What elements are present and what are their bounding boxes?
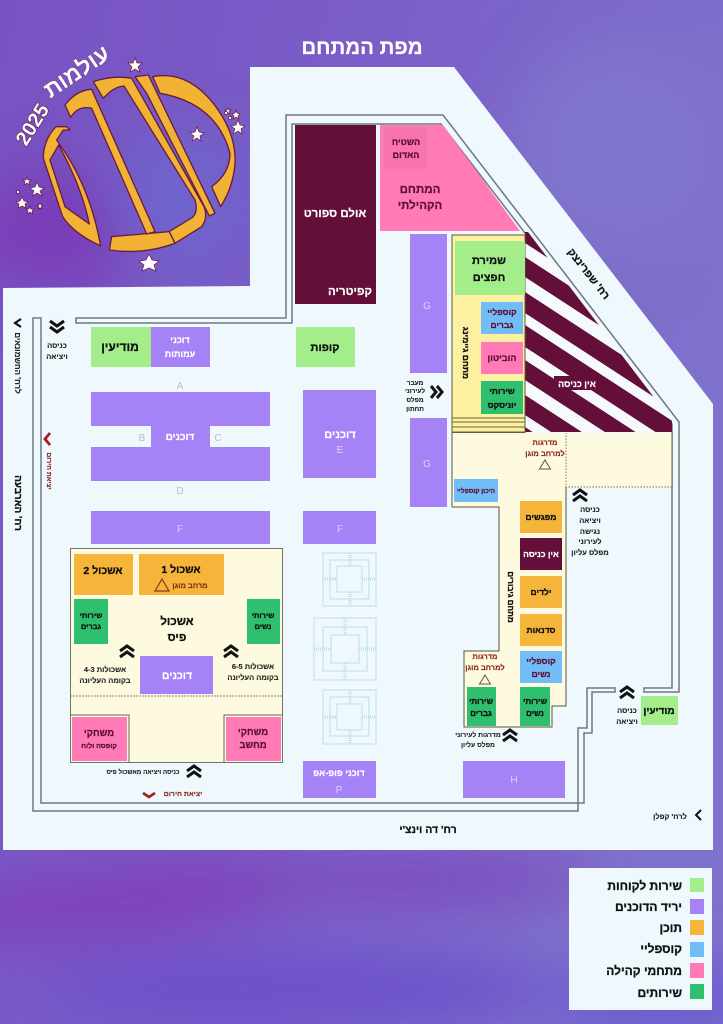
title: מפת המתחם	[301, 36, 423, 59]
legend: content	[660, 920, 704, 935]
vertical zone label: מתחם גיבורים	[506, 571, 515, 623]
pop-up booths: P	[336, 785, 343, 796]
accessible entrance note: ויציאה	[579, 516, 601, 525]
accessible entrance note: לעירוני	[578, 537, 602, 546]
booths G lower: G	[423, 459, 431, 470]
community area: המתחם	[400, 184, 440, 196]
decorative seating squares	[314, 553, 376, 744]
perimeter walls	[33, 115, 679, 811]
women's cosplay: נשים	[532, 669, 550, 679]
booths F right	[303, 511, 376, 544]
logo emblem	[43, 75, 235, 251]
computer games	[226, 717, 281, 761]
street label HaArbaa: רח' הארבעה	[12, 475, 23, 531]
booths F left: F	[177, 524, 183, 535]
women's toilets: שירותי	[252, 611, 274, 620]
kids	[520, 576, 562, 608]
men's toilets	[467, 687, 496, 726]
accessible entrance note	[571, 490, 609, 557]
community area: האדום	[393, 150, 419, 160]
storage room: שמירת	[472, 255, 506, 267]
men's toilets: שירותי	[469, 697, 494, 706]
street label Da Vinci: רח' דה וינצ'י	[399, 824, 457, 836]
accessible entrance note: מפלס עליון	[571, 548, 609, 557]
booths E	[303, 390, 376, 478]
computer games: משחקי	[238, 727, 268, 738]
east entrance note: כניסה	[617, 706, 637, 715]
sports hall: אולם ספורט	[304, 207, 366, 220]
cosplay prep	[454, 479, 498, 502]
community area	[380, 125, 520, 231]
meetups	[520, 501, 562, 533]
passage note: תחתון	[406, 406, 424, 413]
legend: cosplay: קוספליי	[640, 942, 682, 956]
booths G upper	[410, 234, 447, 373]
information desk east: מודיעין	[643, 706, 675, 717]
legend: toilets	[638, 984, 704, 1000]
legend: content: תוכן	[660, 921, 682, 935]
men's toilets: גברים	[81, 622, 102, 631]
women's toilets: נשים	[526, 709, 544, 718]
west entrance	[46, 321, 68, 361]
community area: הקהילתי	[398, 199, 442, 212]
booths H: H	[510, 775, 518, 786]
east entrance note: ויציאה	[616, 717, 638, 726]
hall 1: מרחב מוגן	[172, 581, 208, 590]
booths G upper: G	[423, 301, 431, 312]
pais hall entrance	[107, 766, 201, 777]
women's toilets	[247, 599, 280, 644]
stairs to halls 5-6	[224, 646, 279, 682]
booths F left	[91, 511, 270, 544]
street label Kaplan: לרח' קפלן	[653, 812, 687, 821]
information desk and NGO booths: מודיעין	[101, 340, 139, 354]
accessible entrance note: כניסה	[580, 505, 600, 514]
booth block A B C D: C	[214, 433, 222, 444]
hall name	[160, 615, 194, 644]
stairs note lower: מדרגות	[472, 652, 498, 661]
computer games: מחשב	[239, 740, 267, 751]
stairs to halls 3-4: אשכולות 4-3	[84, 665, 126, 674]
women's toilets: שירותי	[523, 697, 548, 706]
booths H	[463, 761, 565, 798]
unisex toilets: יוניסקס	[488, 400, 516, 410]
hobbiton: הוביטון	[488, 353, 516, 363]
kids: ילדים	[531, 587, 551, 597]
booths E: דוכנים	[324, 429, 356, 441]
lower corridor zone	[452, 433, 672, 727]
no entry box	[520, 538, 562, 570]
booths in hall: דוכנים	[162, 670, 192, 682]
men's cosplay	[481, 302, 523, 334]
sports hall	[295, 125, 376, 304]
hall 1	[139, 554, 224, 595]
booths G lower	[410, 418, 447, 507]
upper level stairs note: מדרגות לעירוני	[455, 731, 501, 739]
stairs note upper	[525, 438, 565, 469]
booth block A B C D: A	[177, 381, 184, 392]
storage room: חפצים	[473, 272, 505, 284]
passage note: לעירוני	[405, 387, 425, 395]
street label Sprinzak: רח' שפרינצק	[565, 246, 612, 302]
sports hall: קפיטריה	[328, 286, 372, 298]
board games: משחקי	[84, 728, 114, 739]
booths in hall	[140, 656, 213, 694]
women's toilets	[520, 687, 550, 726]
logo	[12, 40, 245, 271]
upper hall zone	[452, 235, 525, 433]
unisex toilets: שירותי	[489, 386, 515, 396]
hall 2: אשכול 2	[83, 565, 123, 577]
information desk and NGO booths: דוכני	[170, 335, 190, 345]
men's toilets: שירותי	[80, 611, 102, 620]
stairs to halls 3-4: בקומה העליונה	[79, 676, 131, 685]
stairs note lower	[465, 652, 505, 684]
passage note	[405, 380, 442, 413]
hall 2	[74, 554, 133, 595]
venue floor plan background	[3, 67, 713, 850]
logo title: עולמות	[39, 40, 114, 103]
vertical zone label: מתחם גיימינג	[461, 327, 471, 379]
pop-up booths	[303, 761, 376, 798]
street label Kaplan	[653, 810, 701, 821]
emergency exit south	[143, 791, 202, 798]
legend: community areas: מתחמי קהילה	[606, 964, 682, 978]
information desk and NGO booths: עמותות	[165, 349, 196, 359]
board games: קופסה ולוח	[81, 742, 117, 750]
women's cosplay	[520, 651, 562, 683]
logo stars	[16, 58, 245, 271]
stairs to halls 5-6: אשכולות 6-5	[232, 662, 274, 671]
men's toilets	[74, 599, 108, 644]
no entry box: אין כניסה	[523, 549, 559, 559]
unisex toilets	[481, 381, 523, 414]
hall 1: אשכול 1	[161, 564, 201, 576]
street label Hashmonaim: לרח' החשמונאים	[13, 332, 22, 394]
information desk and NGO booths	[91, 327, 210, 367]
logo year: 2025	[12, 100, 54, 150]
men's cosplay: גברים	[491, 320, 513, 330]
upper level stairs note: מפלס עליון	[461, 741, 495, 749]
information desk east	[641, 696, 678, 725]
storage room	[455, 241, 525, 295]
pais cluster hall	[70, 548, 283, 763]
accessible entrance note: נגישה	[580, 527, 600, 536]
men's cosplay: קוספליי	[487, 307, 517, 317]
booths F right: F	[337, 524, 343, 535]
community area: השטיח	[392, 137, 420, 147]
emergency exit south: יציאת חירום	[164, 791, 202, 798]
stairs to halls 5-6: בקומה העליונה	[227, 673, 279, 682]
legend: toilets: שירותים	[638, 986, 682, 1000]
passage note: מפלס	[406, 396, 424, 404]
booths E: E	[337, 445, 344, 456]
east entrance note	[616, 687, 638, 726]
meetups: מפגשים	[526, 512, 556, 522]
west entrance: ויציאה	[46, 352, 68, 361]
ticket office: קופות	[311, 342, 339, 354]
upper level stairs note	[455, 730, 517, 749]
booth block A B C D: דוכנים	[166, 432, 195, 443]
men's toilets: גברים	[470, 709, 492, 718]
workshops	[520, 614, 562, 646]
legend: booth fair: יריד הדוכנים	[615, 900, 682, 914]
hobbiton	[481, 342, 523, 374]
booth block A B C D: B	[139, 433, 146, 444]
hall name: פיס	[168, 632, 186, 644]
west entrance: כניסה	[47, 341, 67, 350]
stairs note upper: למרחב מוגן	[525, 449, 565, 458]
booth block A B C D: D	[176, 486, 184, 497]
women's toilets: נשים	[255, 622, 271, 631]
stairs to halls 3-4	[79, 646, 134, 685]
booth block A B C D	[91, 381, 270, 497]
emergency exit west	[45, 433, 52, 490]
stairs note lower: למרחב מוגן	[465, 663, 505, 672]
passage note: מעבר	[407, 380, 424, 387]
no-entry hatched area	[525, 232, 672, 432]
no-entry hatched area: אין כניסה	[558, 379, 596, 389]
legend	[569, 868, 712, 1010]
legend: cosplay	[640, 942, 704, 957]
stairs note upper: מדרגות	[532, 438, 558, 447]
ticket office	[296, 327, 355, 367]
board games	[72, 717, 127, 761]
women's cosplay: קוספליי	[526, 656, 556, 666]
pais hall entrance: כניסה ויציאה מאשכול פיס	[107, 768, 180, 776]
emergency exit west: יציאת חירום	[45, 452, 52, 490]
pop-up booths: דוכני פופ-אפ	[313, 768, 365, 778]
cosplay prep: היכון קוספליי	[457, 487, 495, 495]
legend: customer service: שירות לקוחות	[607, 879, 682, 893]
hall name: אשכול	[160, 615, 194, 628]
workshops: סדנאות	[526, 625, 556, 635]
